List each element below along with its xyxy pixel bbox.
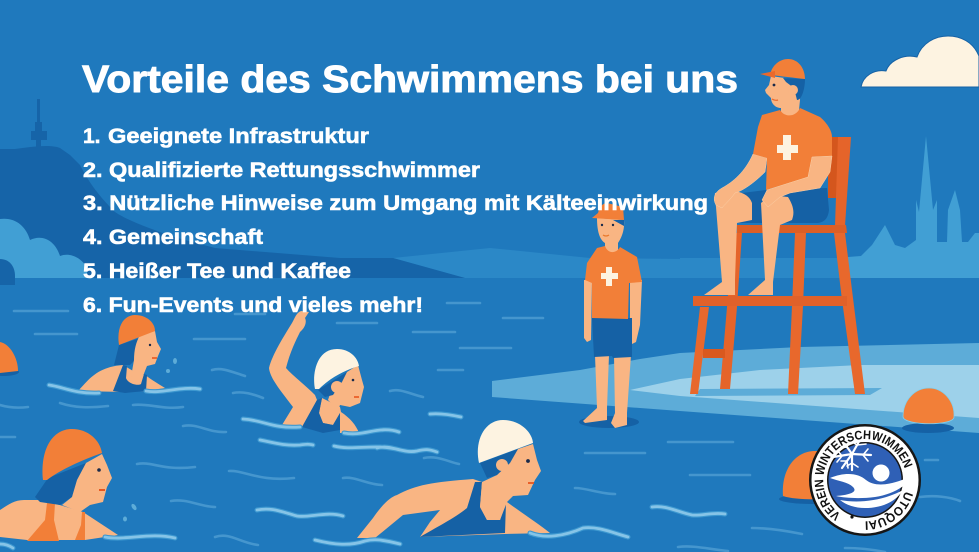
swimmer wave emblem [830, 473, 917, 498]
swimsuit [113, 365, 147, 393]
far arm [714, 154, 767, 208]
shirt [585, 246, 642, 319]
cloud [861, 36, 979, 87]
far leg [704, 191, 752, 295]
cap [770, 59, 805, 79]
standing lifeguard [579, 203, 642, 428]
buoy: on deck [902, 388, 954, 433]
title: Vorteile des Schwimmens bei uns [82, 59, 738, 101]
swimsuit [27, 503, 59, 541]
arms [584, 280, 592, 342]
lighter deck area [630, 365, 979, 418]
buoy: left edge [0, 342, 19, 376]
legs [583, 355, 609, 423]
droplets [173, 358, 177, 364]
seated lifeguard [704, 59, 832, 295]
shirt [753, 108, 832, 190]
item 5: 5. Heißer Tee und Kaffee [83, 260, 351, 283]
ring text [823, 439, 906, 514]
face [480, 444, 541, 520]
swimmer 4: white cap, bottom centre [357, 420, 550, 538]
cap [43, 429, 102, 480]
face [62, 454, 112, 512]
cap [118, 315, 155, 345]
face [131, 331, 161, 377]
item 3: 3. Nützliche Hinweise zum Umgang mit Kälteeinwirkung [83, 192, 708, 215]
hair [35, 463, 86, 505]
tower on hill [31, 99, 47, 148]
swimsuit [420, 482, 506, 537]
swimsuit [302, 398, 340, 433]
bright wave lines around swimmers [0, 385, 725, 548]
tunnel arch [0, 259, 15, 285]
swimmer 2: white cap, raised arm [269, 311, 364, 433]
shirt cross [777, 135, 798, 160]
lifeguard chair [690, 137, 865, 394]
buoy: behind logo [779, 451, 845, 504]
item 6: 6. Fun-Events und vieles mehr! [83, 294, 423, 317]
neck and head [597, 218, 624, 253]
shadow [579, 416, 639, 428]
cap [314, 349, 359, 389]
hair [114, 337, 143, 365]
sun circle [872, 464, 890, 482]
cathedral skyline [848, 136, 979, 278]
club logo: VEREIN WINTERSCHWIMMEN [814, 430, 912, 522]
neck and head [765, 76, 801, 117]
faint water streaks and waves [0, 303, 960, 552]
chair shadow [695, 388, 882, 396]
swimmer 3: orange cap, bottom left [0, 429, 138, 541]
hair [318, 372, 347, 397]
light bushes on the left [0, 219, 87, 278]
cap [592, 203, 624, 220]
droplets [130, 503, 138, 511]
hair [480, 449, 518, 478]
item 4: 4. Gemeinschaft [83, 226, 263, 249]
benefits list [83, 125, 708, 317]
item 1: 1. [83, 125, 101, 148]
background hills and horizon [0, 99, 979, 278]
pool deck platform [492, 343, 979, 433]
club logo: UTOQUAI [866, 492, 913, 530]
item 1: Geeignete Infrastruktur [108, 125, 369, 148]
near arm [762, 156, 832, 207]
shorts [737, 188, 829, 223]
face [328, 365, 364, 410]
shirt cross [601, 267, 618, 286]
dark hill [0, 146, 465, 278]
hair [783, 78, 805, 100]
item 2: 2. Qualifizierte Rettungsschwimmer [83, 159, 480, 182]
snowflake icon [833, 438, 871, 470]
shorts [592, 318, 632, 358]
cap [478, 420, 533, 463]
near leg [748, 195, 793, 295]
swimmer 1: orange cap, top left [78, 315, 177, 393]
